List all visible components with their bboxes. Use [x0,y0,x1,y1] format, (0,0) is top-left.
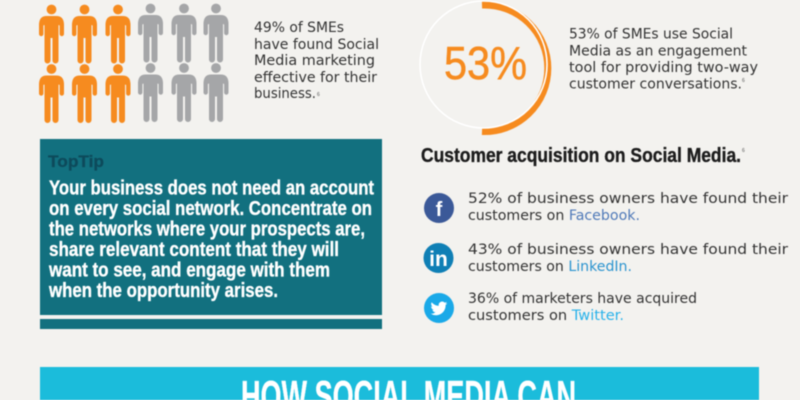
panel: SME effectiveness statistic [39,4,379,123]
text: tip body: when the opportunity arises. [48,280,278,302]
text: Twitter statistic [468,291,697,324]
text: tip body: on every social network. Concentrate on [49,198,372,220]
text: Facebook statistic: 52% of business owners have found their [468,191,788,207]
tip box strip [40,319,382,329]
text: Facebook statistic: customers on Facebook. [468,208,640,224]
icon: LinkedIn: in [429,248,448,271]
panel: 53% engagement statistic [420,1,758,132]
text: engagement tool description [569,26,758,92]
text: Facebook statistic [468,191,788,224]
icon: LinkedIn [424,243,454,273]
text: engagement tool description: Media as an engagement [569,44,747,60]
text: LinkedIn statistic [468,242,788,275]
heading: TopTip: TopTip [48,153,104,171]
text: 49% of SMEs: business. [254,86,316,102]
text: tip body: want to see, and engage with them [48,260,330,282]
chart: 53% ring [420,1,548,132]
text: Twitter statistic: 36% of marketers have acquired [468,291,697,307]
text: 49% of SMEs: 6 [317,92,320,98]
figure: 53%: 53% [444,37,527,89]
text: 49% of SMEs: effective for their [254,70,377,86]
heading: customer acquisition: Customer acquisition on Social Media. [421,145,741,167]
icon: Facebook [424,193,454,223]
text: 49% of SMEs: 49% of SMEs [254,20,344,36]
icon: Twitter [424,293,454,323]
text: 49% of SMEs [254,20,379,102]
section banner [39,366,760,400]
panel: top tip [40,139,382,329]
text: LinkedIn statistic: customers on LinkedIn. [468,259,632,275]
icon: Facebook: f [436,199,443,221]
text: Twitter statistic: customers on Twitter. [468,308,624,324]
text: engagement tool description: tool for providing two-way [569,60,758,76]
text: tip body: Your business does not need an account [49,178,374,200]
text: engagement tool description: customer conversations. [569,76,742,92]
text: engagement tool description: 6 [742,78,745,84]
text: LinkedIn statistic: 43% of business owners have found their [468,242,788,258]
text: tip body: the networks where your prospects are, [49,218,365,240]
panel: customer acquisition [421,145,788,324]
text: tip body [48,178,374,302]
text: 49% of SMEs: have found Social [254,37,379,53]
text: engagement tool description: 53% of SMEs use Social [569,26,733,42]
text: tip body: share relevant content that they will [49,239,339,261]
text: 49% of SMEs: Media marketing [254,53,375,69]
tip box background [40,139,382,315]
icon row: people pictogram [39,4,228,123]
heading: customer acquisition: 6 [742,148,745,154]
